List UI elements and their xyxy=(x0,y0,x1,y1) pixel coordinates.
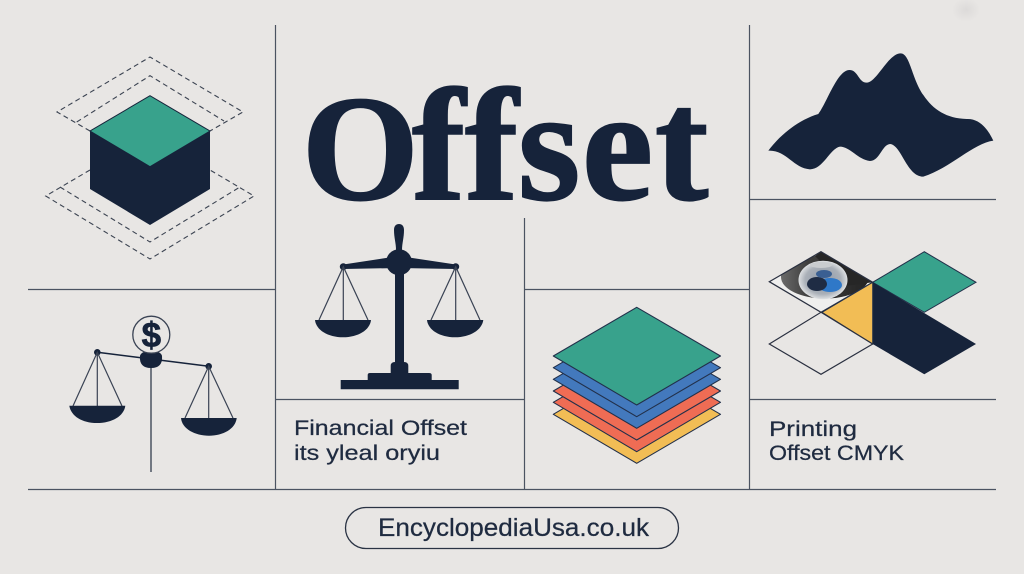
icon: CMYK diamonds with photo xyxy=(765,250,976,374)
text: financial offset caption: its yleal oryiu xyxy=(294,442,440,465)
icon: offset cube with dashed registration outlines xyxy=(46,57,254,259)
text: printing offset CMYK caption xyxy=(769,418,904,465)
text: financial offset caption xyxy=(294,417,467,465)
title: O xyxy=(302,66,419,232)
title: ffset xyxy=(412,56,708,234)
icon: stacked colour plates xyxy=(553,307,720,463)
text: financial offset caption: Financial Offset xyxy=(294,417,467,440)
photo diamond with glass dome xyxy=(768,251,873,312)
text: printing offset CMYK caption: Offset CMYK xyxy=(769,442,904,465)
icon: small scale with dollar coin xyxy=(69,316,237,472)
text: printing offset CMYK caption: Printing xyxy=(769,418,857,441)
footer pill: site name xyxy=(346,508,678,548)
footer pill: site name: EncyclopediaUsa.co.uk xyxy=(378,514,650,542)
icon: dollar sign: $ xyxy=(142,316,161,355)
icon: large balance scale xyxy=(315,224,483,389)
icon: mountain ink blob xyxy=(768,53,993,177)
